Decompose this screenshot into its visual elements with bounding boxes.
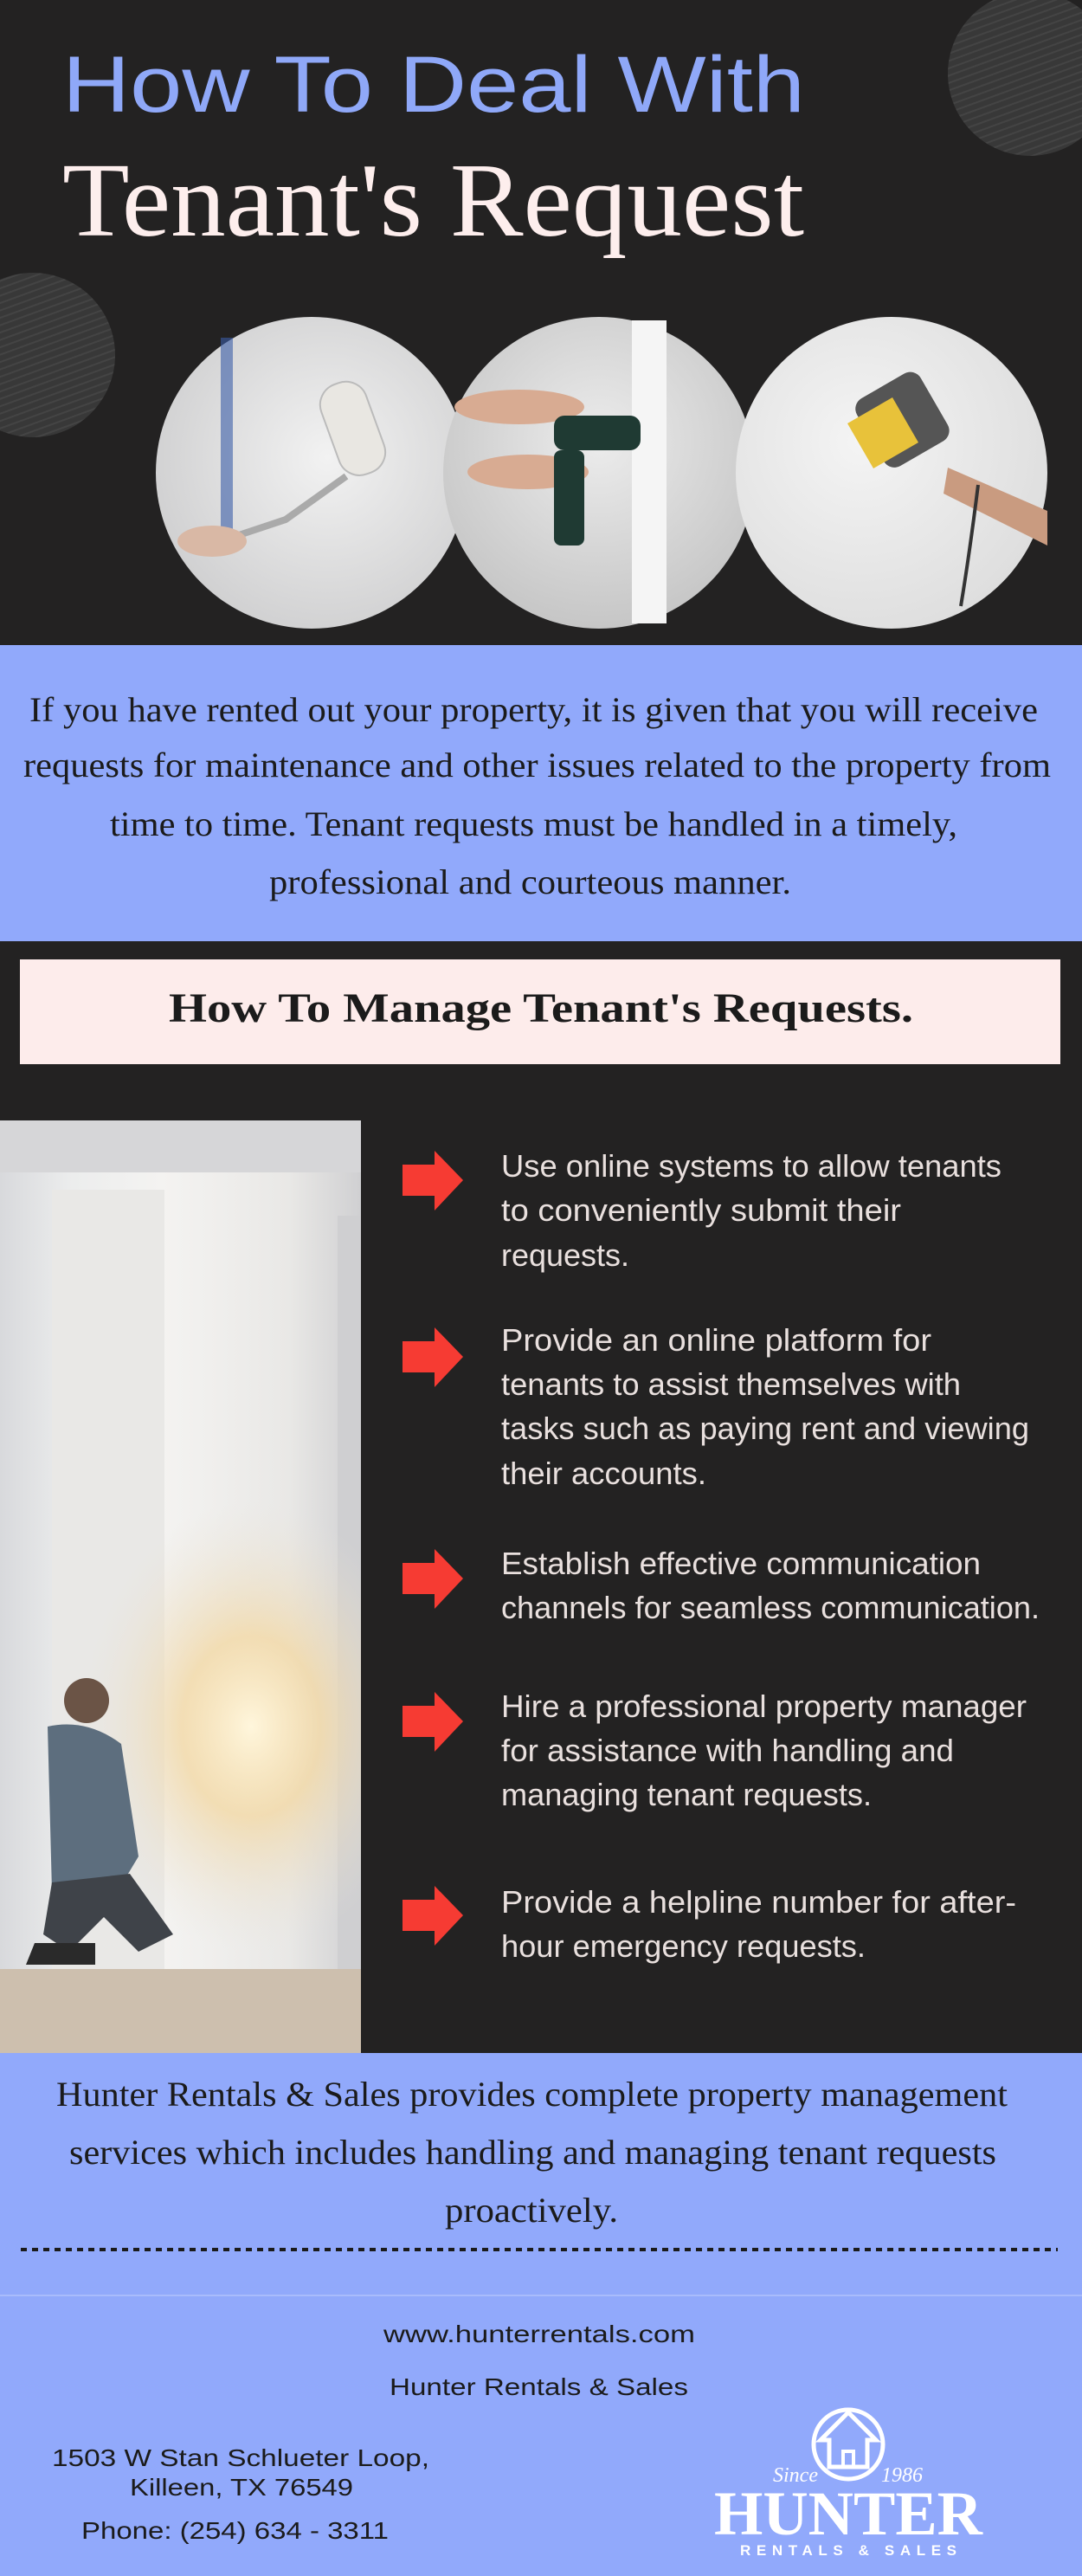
logo: Hunter Rentals & Sales: Since [773,2464,818,2487]
tip 3: Establish effective communication [501,1546,981,1581]
tip 2: Provide an online platform for [501,1322,931,1358]
logo: Hunter Rentals & Sales: 1986 [881,2464,923,2487]
photo circle: paint roller [156,317,467,629]
arrow icon [403,1692,463,1752]
logo: Hunter Rentals & Sales: RENTALS & SALES [740,2542,956,2559]
title line 2: Tenant's Request [62,142,804,259]
list of tips [403,1148,1040,1964]
tip 5: hour emergency requests. [501,1928,866,1964]
heading text: How To Manage Tenant's Requests. [169,985,913,1031]
tip 4 [403,1688,1027,1812]
arrow icon [403,1327,463,1387]
intro band [0,645,1082,941]
closing text [56,2075,1008,2230]
tip 1: Use online systems to allow tenants [501,1148,1001,1184]
tip 4: managing tenant requests. [501,1777,872,1812]
contact: address and phone: 1503 W Stan Schlueter Loop, [52,2444,429,2471]
tip 2 [403,1322,1029,1491]
intro text: professional and courteous manner. [269,862,791,901]
closing text: proactively. [445,2191,618,2230]
contact: address and phone [52,2444,429,2544]
photo circle: drill [443,317,755,629]
tip 3 [403,1546,1040,1625]
tip 5 [403,1884,1016,1964]
tip 2: tenants to assist themselves with [501,1366,961,1402]
intro text [23,690,1051,901]
intro text: time to time. Tenant requests must be handled in a timely, [110,804,957,843]
closing text: Hunter Rentals & Sales provides complete property management [56,2075,1008,2114]
tip 3: channels for seamless communication. [501,1590,1040,1625]
arrow icon [403,1549,463,1609]
tip 1: to conveniently submit their [501,1192,901,1228]
intro text: If you have rented out your property, it is given that you will receive [29,690,1038,729]
arrow icon [403,1151,463,1211]
photo circle: sander [736,317,1047,629]
photo: worker with lamp [0,1120,361,2053]
decorative circle top right [948,0,1082,156]
contact: website and name: Hunter Rentals & Sales [390,2373,688,2400]
contact: website and name [383,2321,695,2400]
tip 4: for assistance with handling and [501,1733,954,1768]
tip 2: tasks such as paying rent and viewing [501,1411,1029,1446]
decorative circle left [0,273,115,437]
contact: website and name: www.hunterrentals.com [383,2321,695,2347]
tip 2: their accounts. [501,1456,706,1491]
tip 5: Provide a helpline number for after- [501,1884,1016,1920]
intro text: requests for maintenance and other issues related to the property from [23,746,1051,784]
tip 1: requests. [501,1237,629,1273]
logo: Hunter Rentals & Sales: HUNTER [714,2479,983,2548]
tip 4: Hire a professional property manager [501,1688,1027,1724]
title line 1: How To Deal With [62,41,805,129]
header section [0,0,1082,645]
logo: Hunter Rentals & Sales [714,2410,983,2559]
heading box [20,959,1060,1064]
tip 1 [403,1148,1001,1273]
contact: address and phone: Phone: (254) 634 - 3311 [81,2517,389,2544]
closing text: services which includes handling and managing tenant requests [69,2133,996,2172]
footer band [0,2053,1082,2576]
arrow icon [403,1886,463,1946]
contact: address and phone: Killeen, TX 76549 [130,2474,353,2501]
